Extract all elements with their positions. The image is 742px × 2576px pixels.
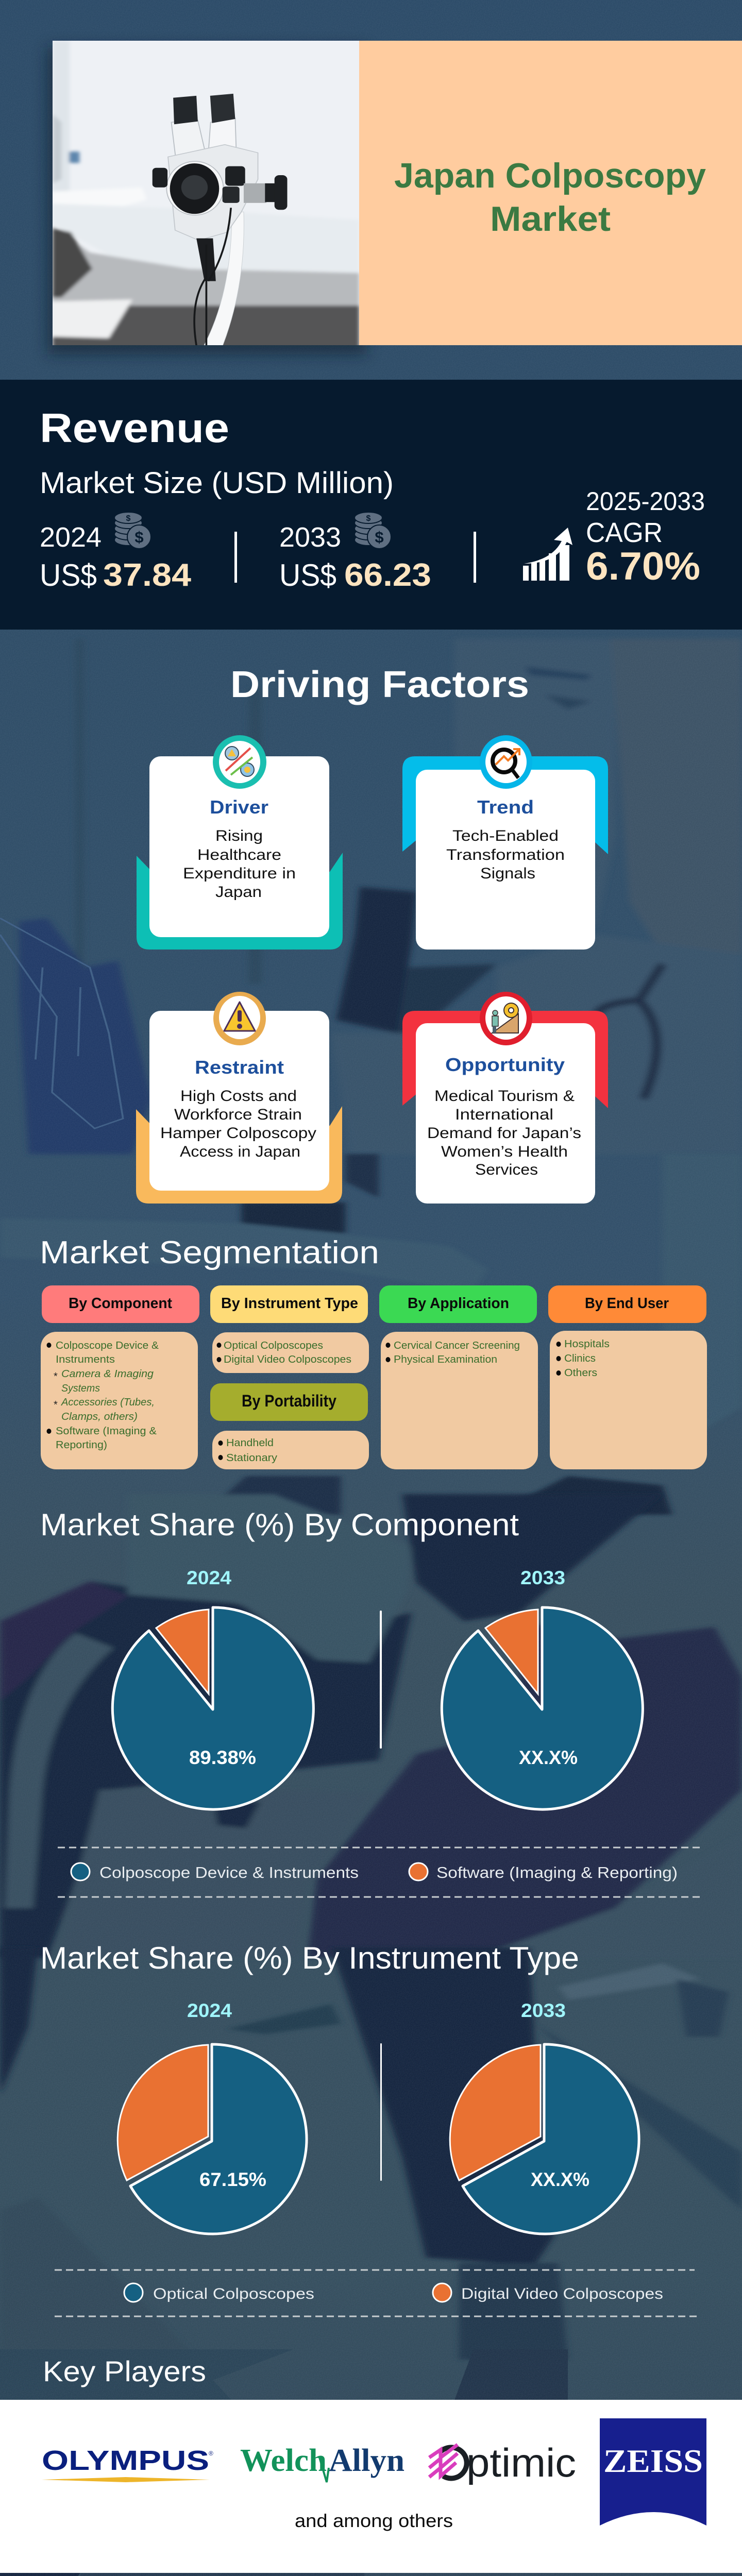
icon: coins 2033: $ — [366, 514, 371, 523]
pie 2024 — [117, 2044, 307, 2234]
market size label: Market Size (USD Million) — [40, 466, 394, 500]
list: component: Clamps, others) — [61, 1411, 138, 1422]
list: component: Colposcope Device & — [56, 1340, 159, 1351]
panel: driver — [137, 735, 343, 950]
legend: instrument type share — [55, 2270, 700, 2316]
year label 2024: 2024 — [187, 2000, 232, 2021]
list: end user: Hospitals — [564, 1338, 610, 1350]
segment header: by portability — [210, 1383, 368, 1421]
body text: International — [455, 1106, 553, 1123]
pie 2024 — [112, 1607, 313, 1809]
icon: coins 2024: $ — [134, 528, 144, 546]
list: component: Software (Imaging & — [56, 1426, 157, 1437]
revenue heading: Revenue — [40, 405, 229, 451]
2033 value: US$ — [279, 558, 336, 592]
logo: olympus: OLYMPUS — [42, 2445, 209, 2476]
icon: driver — [213, 735, 266, 789]
2033 value: 66.23 — [344, 557, 431, 593]
body text: Rising — [215, 827, 263, 844]
year label 2024: 2024 — [187, 1567, 231, 1588]
2033 value: 2033 — [279, 522, 341, 553]
panel: key players logos — [0, 2400, 742, 2573]
icon: growth chart arrow — [523, 528, 572, 581]
segment header: by application — [379, 1285, 537, 1323]
divider — [380, 1611, 382, 1749]
CAGR — [586, 487, 705, 588]
segment header: by instrument type: By Instrument Type — [221, 1295, 358, 1312]
pie 2033: XX.X% — [531, 2169, 589, 2190]
pie 2024: 89.38% — [189, 1747, 256, 1768]
heading: Restraint — [195, 1057, 284, 1078]
CAGR: 2025-2033 — [586, 487, 705, 516]
2024 value — [40, 522, 192, 593]
segment header: by instrument type — [210, 1285, 368, 1323]
legend: instrument type share: Optical Colposcopes — [153, 2285, 314, 2302]
panel: restraint — [136, 992, 342, 1204]
list: portability: Handheld — [226, 1437, 274, 1449]
list: instrument type — [212, 1332, 369, 1373]
panel: segmentation table — [41, 1285, 707, 1469]
divider — [474, 532, 476, 583]
heading: market segmentation: Market Segmentation — [40, 1235, 379, 1270]
list: end user: Clinics — [564, 1353, 596, 1364]
body text: Access in Japan — [180, 1143, 300, 1160]
list: instrument type: Digital Video Colposcopes — [224, 1354, 351, 1365]
segment header: by portability: By Portability — [242, 1392, 336, 1410]
and among others: and among others — [295, 2510, 453, 2531]
body text: Women’s Health — [441, 1143, 568, 1160]
segment header: by end user: By End User — [585, 1295, 669, 1312]
icon: trend — [480, 735, 532, 789]
logo: olympus: ® — [209, 2450, 213, 2457]
list: application — [381, 1332, 538, 1469]
body text: Transformation — [446, 846, 565, 863]
divider — [380, 2043, 382, 2181]
segment header: by component — [42, 1285, 199, 1323]
logo: welch allyn: Allyn — [329, 2443, 404, 2478]
divider — [234, 532, 237, 583]
2024 value: 2024 — [40, 522, 102, 553]
heading: market share by component: Market Share (%) By Component — [40, 1507, 519, 1542]
logo: welch allyn — [240, 2443, 404, 2482]
list: end user: Others — [564, 1367, 597, 1379]
icon: coins 2033 — [355, 512, 391, 549]
list: component: Reporting) — [56, 1439, 107, 1451]
list: portability — [212, 1431, 369, 1469]
logo: optimic: ptimic — [466, 2440, 576, 2485]
logo: olympus — [42, 2445, 213, 2482]
body text: Healthcare — [197, 846, 281, 863]
body text: Services — [475, 1161, 538, 1178]
list: application: Physical Examination — [394, 1354, 497, 1365]
body text: Japan — [215, 884, 262, 901]
logo: zeiss: ZEISS — [603, 2443, 703, 2479]
body text — [427, 1088, 581, 1178]
panel: trend — [402, 735, 608, 950]
CAGR: CAGR — [586, 517, 663, 548]
body text: Hamper Colposcopy — [160, 1125, 316, 1142]
year label 2033: 2033 — [521, 2000, 566, 2021]
panel: revenue — [0, 380, 742, 630]
pie 2033 — [442, 1607, 643, 1809]
list: component: * — [54, 1399, 58, 1411]
list: component: * — [54, 1371, 58, 1382]
heading: key players: Key Players — [43, 2355, 206, 2387]
logo: zeiss — [600, 2418, 706, 2526]
legend: instrument type share: Digital Video Colposcopes — [461, 2285, 663, 2302]
body text: Expenditure in — [183, 865, 296, 882]
list: portability: Stationary — [226, 1452, 277, 1464]
CAGR: 6.70% — [586, 545, 700, 588]
body text: Tech-Enabled — [452, 827, 559, 844]
2024 value: US$ — [40, 558, 97, 592]
chart: instrument type share — [117, 2000, 639, 2234]
pie 2033: XX.X% — [519, 1747, 578, 1768]
heading: Driver — [210, 796, 268, 818]
logo: welch allyn: Welch — [240, 2443, 327, 2478]
pie 2024: 67.15% — [199, 2169, 266, 2190]
list: application: Cervical Cancer Screening — [394, 1340, 520, 1351]
icon: coins 2024 — [114, 512, 151, 549]
body text: Demand for Japan’s — [427, 1125, 581, 1142]
list: component: Systems — [61, 1383, 100, 1394]
segment header: by application: By Application — [408, 1295, 509, 1312]
heading: Trend — [477, 796, 534, 818]
heading: driving factors: Driving Factors — [230, 664, 529, 705]
body text: High Costs and — [180, 1088, 297, 1105]
year label 2033: 2033 — [520, 1567, 565, 1588]
legend: component share: Software (Imaging & Reporting) — [436, 1863, 678, 1882]
hero photo: colposcope on stand — [53, 41, 359, 350]
panel: opportunity — [402, 992, 608, 1204]
body text: Medical Tourism & — [434, 1088, 575, 1105]
body text: Workforce Strain — [174, 1106, 302, 1123]
pie 2033 — [450, 2044, 639, 2234]
list: component: Instruments — [56, 1354, 115, 1365]
body text: Signals — [480, 865, 535, 882]
hero banner — [47, 41, 742, 354]
title panel — [359, 41, 742, 345]
heading: market share by instrument type: Market Share (%) By Instrument Type — [40, 1941, 579, 1975]
icon: coins 2033: $ — [375, 528, 384, 546]
list: end user — [550, 1331, 707, 1469]
segment header: by component: By Component — [69, 1295, 172, 1312]
legend: component share: Colposcope Device & Instruments — [99, 1863, 359, 1882]
body text — [160, 1088, 316, 1160]
list: instrument type: Optical Colposcopes — [224, 1340, 323, 1351]
title: Market — [490, 199, 611, 239]
2024 value: 37.84 — [103, 557, 192, 593]
icon: restraint — [213, 992, 266, 1045]
list: component — [41, 1332, 198, 1469]
title — [394, 156, 706, 239]
2033 value — [279, 522, 431, 593]
list: component: Camera & Imaging — [61, 1368, 154, 1380]
legend: component share — [58, 1848, 700, 1897]
chart: component share — [112, 1567, 643, 1809]
colposcope arm — [204, 212, 244, 346]
body text — [183, 827, 296, 901]
title: Japan Colposcopy — [394, 156, 706, 195]
list: component: Accessories (Tubes, — [61, 1397, 155, 1408]
body text — [446, 827, 565, 882]
heading: Opportunity — [445, 1054, 565, 1075]
segment header: by end user — [548, 1285, 706, 1323]
icon: coins 2024: $ — [126, 514, 131, 523]
icon: opportunity — [480, 992, 532, 1045]
